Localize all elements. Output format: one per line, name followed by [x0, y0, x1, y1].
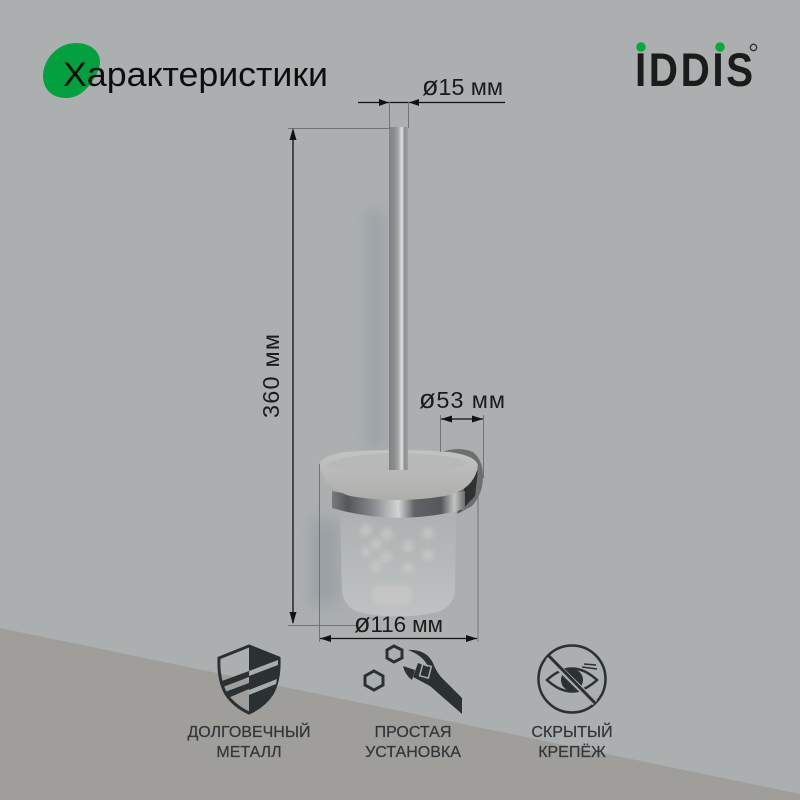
heading: Характеристики	[43, 43, 328, 98]
wall mount	[441, 449, 483, 514]
product: toilet brush holder	[319, 127, 483, 616]
label: easy installation: УСТАНОВКА	[365, 744, 461, 761]
label: hidden fastening: СКРЫТЫЙ	[531, 722, 613, 741]
label: durable metal	[187, 722, 311, 761]
dimension: height 360 mm	[258, 128, 390, 626]
glass cup	[340, 510, 456, 616]
floor	[0, 628, 800, 800]
heading text: Характеристики	[63, 56, 328, 94]
icon: crossed eye	[538, 646, 606, 712]
label: hidden fastening	[531, 722, 613, 761]
label: durable metal: ДОЛГОВЕЧНЫЙ	[187, 722, 311, 741]
logo: IDDIS: IDDIS	[635, 44, 756, 97]
dimension: height 360 mm: 360 мм	[258, 334, 284, 418]
glass bowl	[319, 450, 478, 500]
icon: shield	[219, 646, 279, 713]
dimension: diameter 116 mm	[320, 464, 478, 642]
brush handle	[389, 127, 408, 470]
brush bristles seen through the cup	[360, 524, 434, 605]
dimension: diameter 53 mm: ø53 мм	[419, 384, 505, 414]
label: hidden fastening: КРЕПЁЖ	[538, 743, 606, 761]
dimension: diameter 15 mm: ø15 мм	[422, 71, 503, 101]
product shadow	[312, 210, 382, 605]
dimension: diameter 53 mm	[419, 384, 505, 478]
label: easy installation	[365, 724, 461, 761]
metal ring	[332, 491, 465, 518]
dimension: diameter 116 mm: ø116 мм	[354, 608, 443, 638]
label: durable metal: МЕТАЛЛ	[216, 744, 282, 761]
dimension: diameter 15 mm	[358, 71, 505, 128]
green blob	[43, 43, 100, 98]
label: easy installation: ПРОСТАЯ	[375, 724, 451, 741]
icon: wrench and nuts	[365, 646, 462, 714]
